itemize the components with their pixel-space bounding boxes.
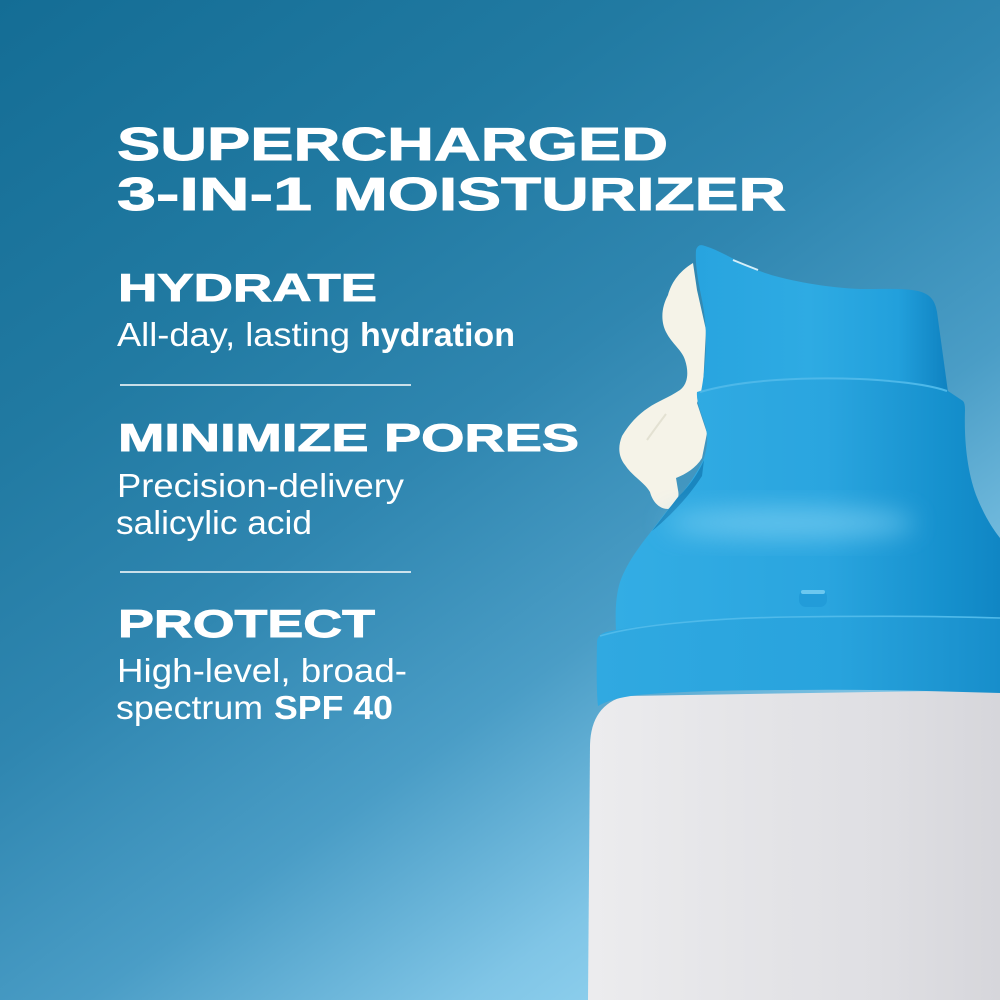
section: minimize pores: MINIMIZE PORES bbox=[118, 417, 579, 460]
product bottle illustration bbox=[588, 245, 1000, 1000]
section: protect bbox=[116, 603, 407, 726]
bottle body bbox=[588, 690, 1000, 1000]
section: minimize pores: salicylic acid bbox=[116, 504, 312, 541]
cream fold shadow bbox=[647, 414, 666, 440]
base ring bbox=[597, 616, 1000, 706]
section: hydrate bbox=[117, 267, 515, 353]
section: protect: PROTECT bbox=[118, 603, 375, 646]
collar top edge highlight bbox=[700, 378, 947, 392]
section: hydrate: All-day, lasting bbox=[117, 316, 350, 353]
ring top edge highlight bbox=[600, 616, 1000, 636]
nozzle highlight bbox=[733, 260, 758, 270]
pump collar and shoulder bbox=[616, 378, 1000, 630]
title: MOISTURIZER bbox=[333, 168, 786, 220]
shoulder highlight bbox=[665, 508, 915, 538]
section: hydrate: HYDRATE bbox=[118, 267, 377, 310]
cream shadow on shoulder bbox=[652, 460, 704, 531]
title: 3-IN-1 bbox=[117, 168, 312, 220]
shoulder nub bbox=[799, 590, 827, 607]
pump nozzle bbox=[696, 245, 948, 392]
section: hydrate: hydration bbox=[360, 316, 515, 353]
title: SUPERCHARGED bbox=[117, 118, 668, 170]
section: protect: High-level, broad- bbox=[117, 652, 407, 689]
section: minimize pores bbox=[116, 417, 579, 541]
section: protect: spectrum bbox=[116, 689, 263, 726]
cream swirl bbox=[619, 263, 707, 509]
title bbox=[117, 118, 786, 220]
section: minimize pores: Precision-delivery bbox=[117, 467, 405, 504]
section: protect: SPF 40 bbox=[274, 689, 393, 726]
